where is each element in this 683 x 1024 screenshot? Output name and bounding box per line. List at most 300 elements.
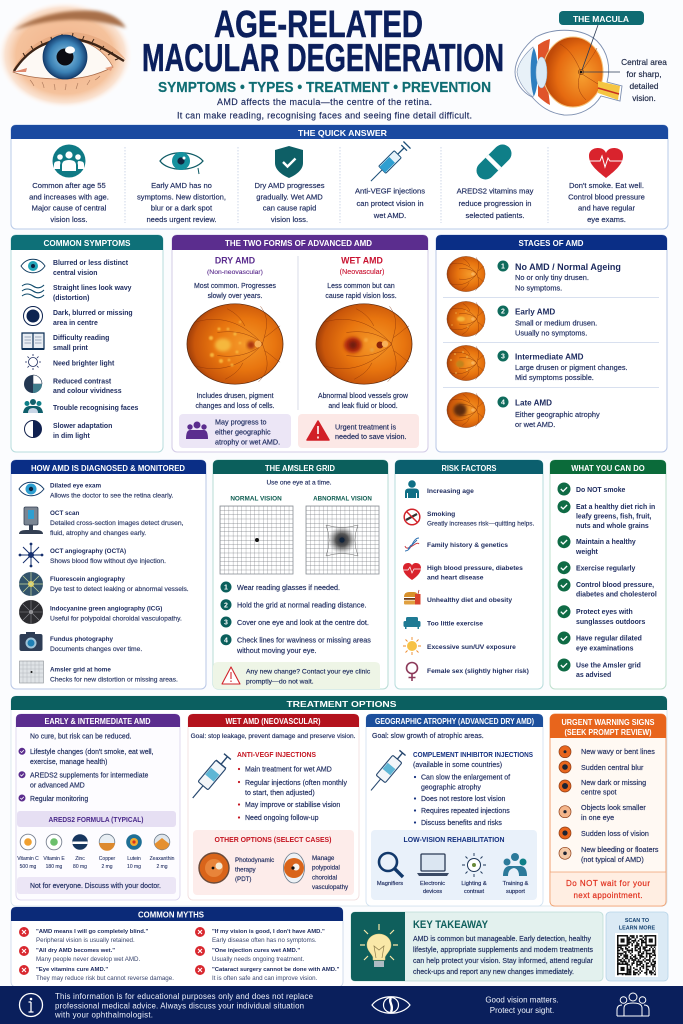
text: list: AREDS2 supplements for intermediate bbox=[30, 772, 149, 780]
stage 1: No or only tiny drusen. bbox=[515, 273, 589, 282]
text: availability: (available in some countries) bbox=[413, 762, 502, 769]
panel: two forms of advanced AMD: THE TWO FORMS OF ADVANCED AMD bbox=[225, 239, 372, 248]
icon: DNA bbox=[405, 538, 419, 551]
icon: people outline bbox=[617, 993, 649, 1016]
icon: camera bbox=[20, 632, 42, 651]
text: blurred: central vision bbox=[53, 270, 97, 277]
text: good vision matters: Protect your sight. bbox=[490, 1006, 554, 1015]
panel: the quick answer: THE QUICK ANSWER bbox=[298, 128, 387, 138]
icon: faces bbox=[23, 399, 43, 413]
icon: sun bbox=[25, 354, 41, 370]
text: action list: Maintain a healthy bbox=[576, 539, 636, 546]
panel: two forms of advanced AMD bbox=[172, 235, 428, 452]
text: nutrient labels: Zeaxanthin bbox=[150, 856, 175, 862]
panel: treatment options: TREATMENT OPTIONS bbox=[286, 699, 397, 709]
text: list: Regular monitoring bbox=[30, 796, 88, 803]
text: left myths: "All dry AMD becomes wet." bbox=[36, 948, 115, 954]
text: dry AMD progresses: Dry AMD progresses bbox=[254, 181, 325, 190]
icon: wavy lines bbox=[22, 284, 44, 298]
panel: stages of AMD: STAGES OF AMD bbox=[518, 239, 584, 248]
title: AGE-RELATED bbox=[214, 3, 423, 45]
stage 2 bbox=[447, 301, 597, 338]
text: action list: Use the Amsler grid bbox=[576, 662, 641, 670]
stage 3: Intermediate AMD bbox=[515, 352, 584, 362]
panel: common symptoms bbox=[11, 235, 163, 452]
text: list: exercise, manage health) bbox=[30, 759, 107, 766]
text: action list: eye examinations bbox=[576, 646, 634, 652]
panel: low vision rehabilitation bbox=[371, 830, 537, 900]
panel: the quick answer bbox=[11, 125, 668, 229]
panel: the amsler grid bbox=[213, 460, 388, 689]
sub-panel: geographic atrophy: GEOGRAPHIC ATROPHY (ADVANCED DRY AMD) bbox=[375, 717, 534, 726]
icon: burger and drink bbox=[404, 590, 420, 604]
macula diagram: for sharp, bbox=[626, 69, 662, 79]
panel: risk factors bbox=[395, 460, 543, 689]
text: warning list: centre spot bbox=[581, 788, 617, 796]
text: goal: Goal: slow growth of atrophic areas. bbox=[372, 733, 484, 740]
icon: dilated eye bbox=[19, 482, 44, 496]
icon: capsule bbox=[473, 141, 515, 183]
panel: risk factors: RISK FACTORS bbox=[442, 464, 497, 473]
icon: sun bbox=[403, 637, 421, 655]
steps list: without moving your eye. bbox=[236, 646, 317, 655]
stage 4: Either geographic atrophy bbox=[515, 410, 600, 419]
text: dark area: Dark, blurred or missing bbox=[53, 310, 133, 317]
heading: wet AMD: WET AMD bbox=[341, 256, 383, 266]
heading: anti-VEGF: ANTI-VEGF INJECTIONS bbox=[237, 750, 316, 759]
panel: treatment options bbox=[0, 696, 683, 1024]
callout: any new change: promptly—do not wait. bbox=[246, 678, 314, 686]
text: fundus photography: Fundus photography bbox=[50, 636, 113, 643]
steps list: 2 bbox=[224, 602, 228, 609]
text: AREDS2: reduce progression in bbox=[458, 199, 532, 208]
icon: amsler grid small bbox=[20, 661, 44, 683]
heading: treatment options bbox=[11, 696, 667, 710]
steps list: Cover one eye and look at the centre dot. bbox=[237, 618, 369, 627]
icon: eye bbox=[160, 152, 203, 174]
text: list: or advanced AMD bbox=[30, 782, 85, 790]
subtitle: SYMPTOMS • TYPES • TREATMENT • PREVENTION bbox=[158, 79, 491, 96]
text: right myths: Early disease often has no symptoms. bbox=[212, 937, 317, 944]
text: anti-VEGF list: May improve or stabilise vision bbox=[245, 802, 340, 809]
text: takeaway: can help protect your vision. Stay informed, attend regular bbox=[413, 958, 594, 965]
icon: contrast bbox=[24, 375, 42, 393]
text: dim light: Slower adaptation bbox=[53, 423, 112, 430]
text: OCT scan: Detailed cross-section images detect drusen, bbox=[50, 520, 184, 527]
text: high blood pressure: High blood pressure, diabetes bbox=[427, 565, 523, 572]
text: action list: Have regular dilated bbox=[576, 636, 642, 642]
steps list: 4 bbox=[224, 637, 228, 644]
heading: AREDS2 formula: AREDS2 FORMULA (TYPICAL) bbox=[48, 817, 144, 824]
text: blurred: Blurred or less distinct bbox=[53, 260, 129, 267]
icon: OCTA network bbox=[19, 543, 43, 567]
text: takeaway: AMD is common but manageable. Early detection, healthy bbox=[413, 936, 592, 943]
warning icons bbox=[559, 746, 571, 859]
panel: common symptoms: COMMON SYMPTOMS bbox=[44, 239, 131, 248]
labels: aids: Electronic bbox=[420, 881, 445, 887]
text: nutrient labels: 10 mg bbox=[127, 864, 141, 870]
text: brighter light: Need brighter light bbox=[53, 360, 115, 368]
text: PCV: vasculopathy bbox=[312, 884, 349, 891]
icon: half dark circle bbox=[24, 420, 42, 438]
text: anti-VEGF: can protect vision in bbox=[356, 199, 424, 208]
text: OCTA: OCT angiography (OCTA) bbox=[50, 548, 126, 555]
labels: aids: contrast bbox=[464, 889, 485, 895]
text: fluorescein: Dye test to detect leaking or abnormal vessels. bbox=[50, 586, 189, 593]
text: disclaimer: This information is for educational purposes only and does not replace bbox=[55, 992, 314, 1001]
text: common after age 55: Common after age 55 bbox=[32, 181, 106, 190]
text: takeaway: lifestyle, appropriate supplements and modern treatments bbox=[413, 947, 594, 954]
text: wavy: (distortion) bbox=[53, 295, 89, 302]
text: common after age 55: Major cause of central bbox=[32, 204, 107, 212]
icon: person bbox=[405, 480, 419, 498]
sub-panel: early and intermediate: EARLY & INTERMEDIATE AMD bbox=[44, 717, 151, 726]
text: disclaimer: professional medical advice. Always discuss your individual situation bbox=[55, 1002, 304, 1010]
stage 2: 2 bbox=[501, 309, 505, 316]
panel: the amsler grid: THE AMSLER GRID bbox=[265, 464, 335, 473]
text: nutrient labels: 80 mg bbox=[73, 864, 87, 870]
stage 4: 4 bbox=[501, 400, 505, 407]
callout: do not wait: next appointment. bbox=[574, 891, 642, 900]
icon: heart bbox=[403, 563, 421, 580]
text: don't smoke: Don't smoke. Eat well. bbox=[569, 181, 644, 190]
panel: QR code: SCAN TO bbox=[625, 918, 649, 924]
heading: dry AMD: (Non-neovascular) bbox=[207, 269, 263, 276]
heading: urgent bbox=[550, 714, 666, 738]
text: nutrient labels: Vitamin E bbox=[43, 856, 65, 862]
text: warning list: New wavy or bent lines bbox=[581, 747, 655, 756]
callout: may progress bbox=[179, 414, 291, 448]
icon: ICG bbox=[19, 600, 43, 624]
text: early AMD: Early AMD has no bbox=[151, 181, 212, 190]
text: warning list: New bleeding or floaters bbox=[581, 845, 659, 854]
heading: early bbox=[16, 714, 180, 727]
text: exercise: Too little exercise bbox=[427, 620, 483, 628]
stage 1 bbox=[447, 256, 621, 292]
text: early AMD: blur or a dark spot bbox=[151, 204, 213, 212]
icon: book bbox=[22, 333, 44, 349]
heading: dry AMD: DRY AMD bbox=[215, 256, 255, 266]
panel: QR code bbox=[606, 912, 668, 981]
heading: two forms bbox=[172, 235, 428, 250]
check marks bbox=[558, 482, 570, 672]
text: right myths: "One injection cures wet AMD." bbox=[212, 948, 300, 954]
text: common after age 55: and increases with age. bbox=[29, 192, 109, 202]
text: list: Lifestyle changes (don't smoke, eat well, bbox=[30, 749, 154, 756]
icon: PDT bbox=[199, 853, 229, 883]
text: female: Female sex (slightly higher risk) bbox=[427, 668, 529, 675]
heading: the quick answer bbox=[11, 125, 668, 139]
icon: heart bbox=[588, 148, 624, 178]
text: nutrient labels: 2 mg bbox=[156, 864, 168, 870]
sub-panel: wet AMD treatment: WET AMD (NEOVASCULAR) bbox=[226, 717, 321, 726]
labels: aids: support bbox=[506, 889, 525, 895]
stage 1: No symptoms. bbox=[515, 284, 562, 292]
text: amsler at home: Amsler grid at home bbox=[50, 666, 111, 674]
text: high blood pressure: and heart disease bbox=[427, 574, 484, 582]
icon: syringe bbox=[367, 141, 411, 185]
callout: urgent treatment: needed to save vision. bbox=[335, 432, 407, 441]
text: faces: Trouble recognising faces bbox=[53, 405, 139, 412]
text: PDT: (PDT) bbox=[235, 876, 252, 883]
heading: geographic atrophy bbox=[366, 714, 543, 727]
text: nutrient labels: Vitamin C bbox=[17, 856, 39, 862]
text: warning list: Sudden loss of vision bbox=[581, 829, 649, 838]
text: anti-VEGF list: Need ongoing follow-up bbox=[245, 815, 319, 822]
icon: shield bbox=[275, 146, 303, 178]
image: dry fundus bbox=[187, 304, 283, 384]
panel: common myths: COMMON MYTHS bbox=[138, 911, 204, 920]
text: warning list: Sudden central blur bbox=[581, 763, 644, 772]
text: complement list: geographic atrophy bbox=[421, 784, 481, 792]
macula diagram: THE MACULA bbox=[573, 14, 629, 24]
stage 4: or wet AMD. bbox=[515, 420, 555, 429]
callout: do not wait: Do NOT wait for your bbox=[566, 879, 650, 888]
panel: QR code: LEARN MORE bbox=[619, 926, 656, 932]
callout: may progress: either geographic bbox=[215, 428, 271, 436]
callout: may progress: May progress to bbox=[215, 418, 267, 426]
icon: syringe bbox=[188, 752, 232, 802]
text: anti-VEGF: wet AMD. bbox=[373, 211, 406, 220]
macula diagram bbox=[515, 11, 667, 115]
sub-panel: early and intermediate bbox=[16, 714, 180, 900]
text: OCT scan: fluid, atrophy and changes early. bbox=[50, 530, 146, 537]
text: anti-VEGF: Anti-VEGF injections bbox=[355, 186, 425, 196]
bullets bbox=[414, 776, 416, 824]
macula diagram: detailed bbox=[629, 81, 659, 91]
heading: common symptoms bbox=[11, 235, 163, 250]
stage 3: Mid symptoms possible. bbox=[515, 373, 594, 382]
icon: lamp bbox=[462, 853, 486, 877]
icon: laptop bbox=[417, 854, 449, 876]
text: dry AMD progresses: can cause rapid bbox=[263, 204, 316, 212]
text: left myths: "AMD means I will go completely blind." bbox=[36, 929, 148, 935]
header illustration: human eye bbox=[0, 1, 133, 109]
steps list: 3 bbox=[224, 620, 228, 627]
qr image bbox=[615, 933, 658, 977]
heading: diagnosed bbox=[11, 460, 206, 474]
text: PCV: choroidal bbox=[312, 874, 337, 882]
icon: info bbox=[20, 994, 42, 1016]
text: nutrient labels: Copper bbox=[99, 856, 116, 862]
icon: fluorescein bbox=[19, 572, 43, 596]
callout: any new change bbox=[213, 662, 380, 689]
text: dark area: area in centre bbox=[53, 320, 98, 327]
title bbox=[142, 3, 504, 80]
heading: what you can do bbox=[550, 460, 666, 474]
callout: other options: OTHER OPTIONS (SELECT CASES) bbox=[214, 835, 332, 844]
heading: amsler grid bbox=[213, 460, 388, 474]
icon: light bulb bbox=[360, 924, 398, 967]
panel: what you can do: WHAT YOU CAN DO bbox=[571, 464, 645, 473]
macula diagram: Central area bbox=[621, 57, 667, 67]
stage 2: Early AMD bbox=[515, 308, 555, 316]
text: unhealthy diet: Unhealthy diet and obesity bbox=[427, 597, 512, 604]
chart: normal grid bbox=[220, 506, 293, 574]
icon: eye bbox=[372, 997, 410, 1013]
icon: people in circle bbox=[52, 144, 86, 178]
text: complement list: Discuss benefits and risks bbox=[421, 820, 502, 827]
heading: wet AMD bbox=[188, 714, 359, 727]
text: left myths: Many people never develop wet AMD. bbox=[36, 956, 140, 963]
heading: stages bbox=[436, 235, 667, 250]
panel: stages of AMD bbox=[436, 235, 667, 452]
text: complement list: Does not restore lost vision bbox=[421, 796, 506, 803]
stage 2: Usually no symptoms. bbox=[515, 328, 587, 338]
panel: what you can do bbox=[550, 460, 666, 689]
text: action list: diabetes and cholesterol bbox=[576, 592, 657, 598]
panel: low vision rehabilitation: LOW-VISION REHABILITATION bbox=[404, 835, 504, 844]
text: goal: Goal: stop leakage, prevent damage and preserve vision. bbox=[191, 733, 356, 740]
text: contrast: Reduced contrast bbox=[53, 378, 112, 386]
text: nutrient labels: Zinc bbox=[75, 856, 85, 862]
text: takeaway: check-ups and report any new changes immediately. bbox=[413, 969, 574, 976]
text: action list: sunglasses outdoors bbox=[576, 619, 645, 626]
text: dry AMD progresses: vision loss. bbox=[271, 215, 308, 224]
heading: key takeaway: KEY TAKEAWAY bbox=[413, 919, 489, 931]
panel: how AMD is diagnosed: HOW AMD IS DIAGNOSED & MONITORED bbox=[31, 464, 185, 473]
heading: common myths bbox=[11, 907, 343, 921]
intro text: AMD affects the macula—the centre of the retina. bbox=[217, 97, 432, 107]
text: action list: Exercise regularly bbox=[576, 566, 636, 572]
text: complement list: Can slow the enlargement of bbox=[421, 774, 510, 782]
steps list: 1 bbox=[224, 585, 228, 592]
text: good vision matters: Good vision matters. bbox=[485, 996, 559, 1004]
text: wet description: and leak fluid or blood. bbox=[328, 403, 398, 410]
labels: aids: devices bbox=[423, 889, 442, 895]
image: wet fundus bbox=[316, 304, 412, 384]
text: wet description: Abnormal blood vessels grow bbox=[318, 393, 408, 400]
text: action list: Protect eyes with bbox=[576, 609, 633, 616]
sub-panel: urgent warning signs: (SEEK PROMPT REVIEW) bbox=[564, 728, 652, 737]
text: no cure: No cure, but risk can be reduced. bbox=[30, 734, 132, 740]
text: reading: Difficulty reading bbox=[53, 335, 109, 342]
text: family history: Family history & genetics bbox=[427, 542, 508, 549]
text: anti-VEGF list: to start, then adjusted) bbox=[245, 790, 315, 797]
callout: may progress: atrophy or wet AMD. bbox=[215, 438, 280, 446]
text: OCTA: Shows blood flow without dye injection. bbox=[50, 558, 166, 565]
text: warning list: Objects look smaller bbox=[581, 803, 646, 812]
sub-panel: urgent warning signs bbox=[550, 714, 666, 906]
text: left myths: "Eye vitamins cure AMD." bbox=[36, 967, 108, 973]
text: action list: Control blood pressure, bbox=[576, 582, 654, 589]
text: complement list: Requires repeated injections bbox=[421, 808, 510, 815]
text: don't smoke: Control blood pressure bbox=[568, 192, 645, 202]
cross icons bbox=[19, 927, 205, 975]
text: wet intro: Less common but can bbox=[327, 283, 395, 290]
labels: aids: Lighting & bbox=[461, 881, 487, 887]
macula diagram: vision. bbox=[632, 93, 656, 103]
text: fluorescein: Fluorescein angiography bbox=[50, 576, 125, 583]
text: warning list: New dark or missing bbox=[581, 778, 646, 787]
text: common after age 55: vision loss. bbox=[50, 215, 88, 224]
label: abnormal vision: ABNORMAL VISION bbox=[313, 496, 372, 502]
text: wet intro: cause rapid vision loss. bbox=[325, 293, 397, 300]
text: OCT scan: OCT scan bbox=[50, 510, 80, 517]
icon: female symbol bbox=[406, 662, 418, 681]
stage 3 bbox=[447, 345, 628, 382]
text: AREDS2: selected patients. bbox=[465, 211, 525, 220]
icon: training group bbox=[503, 853, 527, 876]
stage 1: 1 bbox=[501, 264, 505, 271]
check icons bbox=[18, 748, 26, 802]
note: not for everyone bbox=[17, 877, 176, 894]
panel: key takeaway bbox=[351, 912, 603, 981]
heading: risk factors bbox=[395, 460, 543, 474]
text: don't smoke: eye exams. bbox=[587, 215, 626, 224]
icon: eye bbox=[21, 259, 45, 273]
text: PDT: therapy bbox=[235, 866, 257, 874]
label: normal vision: NORMAL VISION bbox=[230, 496, 282, 502]
text: nutrient labels: 500 mg bbox=[20, 864, 37, 870]
intro text: It can make reading, recognising faces and seeing fine detail difficult. bbox=[177, 110, 472, 120]
text: dilated exam: Dilated eye exam bbox=[50, 482, 102, 490]
stage 4: Late AMD bbox=[515, 398, 552, 408]
text: nutrient labels: Lutein bbox=[127, 856, 141, 862]
text: left myths: They may reduce risk but cannot reverse damage. bbox=[36, 975, 174, 982]
stage 3: 3 bbox=[501, 354, 505, 361]
callout: any new change: Any new change? Contact your eye clinic bbox=[246, 668, 371, 676]
text: fundus photography: Documents changes over time. bbox=[50, 646, 142, 653]
text: dilated exam: Allows the doctor to see the retina clearly. bbox=[50, 492, 173, 500]
heading: wet AMD bbox=[340, 256, 384, 276]
text: action list: weight bbox=[575, 549, 599, 556]
text: one eye: Use one eye at a time. bbox=[266, 480, 332, 486]
sub-panel: wet AMD treatment bbox=[188, 714, 359, 900]
footer bbox=[0, 986, 683, 1024]
text: dry description: Includes drusen, pigment bbox=[196, 393, 274, 400]
note: not for everyone: Not for everyone. Discuss with your doctor. bbox=[30, 883, 161, 890]
chart: abnormal grid bbox=[306, 506, 379, 574]
text: disclaimer: with your ophthalmologist. bbox=[54, 1010, 153, 1020]
sub-panel: geographic atrophy bbox=[366, 714, 543, 906]
icon: sofa bbox=[404, 617, 420, 629]
text: action list: nuts and whole grains bbox=[576, 523, 649, 530]
heading: complement inhibitor: COMPLEMENT INHIBITOR INJECTIONS bbox=[413, 750, 533, 759]
icon: syringe bbox=[366, 749, 407, 794]
text: PCV: Manage bbox=[312, 855, 335, 862]
callout: do not wait bbox=[550, 872, 666, 906]
steps list: Wear reading glasses if needed. bbox=[237, 583, 340, 592]
steps list bbox=[220, 582, 371, 655]
callout: urgent treatment: Urgent treatment is bbox=[335, 422, 397, 432]
stage 2: Small or medium drusen. bbox=[515, 318, 597, 328]
sub-panel: urgent warning signs: URGENT WARNING SIGNS bbox=[562, 718, 654, 727]
text: action list: as advised bbox=[576, 672, 611, 679]
text: anti-VEGF list: Regular injections (often monthly bbox=[245, 780, 347, 787]
text: amsler at home: Checks for new distortion or missing areas. bbox=[50, 676, 178, 684]
text: age: Increasing age bbox=[427, 488, 474, 495]
heading: AREDS2 formula bbox=[17, 811, 176, 827]
steps list: Hold the grid at normal reading distance. bbox=[237, 600, 366, 610]
text: warning list: (not typical of AMD) bbox=[581, 855, 644, 864]
text: ICG: Indocyanine green angiography (ICG) bbox=[50, 606, 162, 612]
text: action list: leafy greens, fish, fruit, bbox=[576, 514, 652, 520]
labels: aids: Magnifiers bbox=[377, 881, 403, 887]
text: right myths: "If my vision is good, I don't have AMD." bbox=[212, 929, 325, 935]
text: right myths: It is often safe and can improve vision. bbox=[212, 975, 318, 982]
text: PCV: polypoidal bbox=[312, 864, 340, 872]
text: early AMD: needs urgent review. bbox=[146, 215, 217, 224]
chart: nutrient icons bbox=[20, 834, 170, 851]
text: smoking: Smoking bbox=[427, 511, 455, 518]
callout: other options bbox=[193, 830, 354, 895]
bullets bbox=[238, 768, 240, 819]
text: nutrient labels: 180 mg bbox=[46, 864, 63, 870]
text: nutrient labels: 2 mg bbox=[101, 864, 113, 870]
text: don't smoke: and have regular bbox=[578, 204, 635, 212]
text: right myths: Usually needs ongoing treatment. bbox=[212, 956, 304, 963]
